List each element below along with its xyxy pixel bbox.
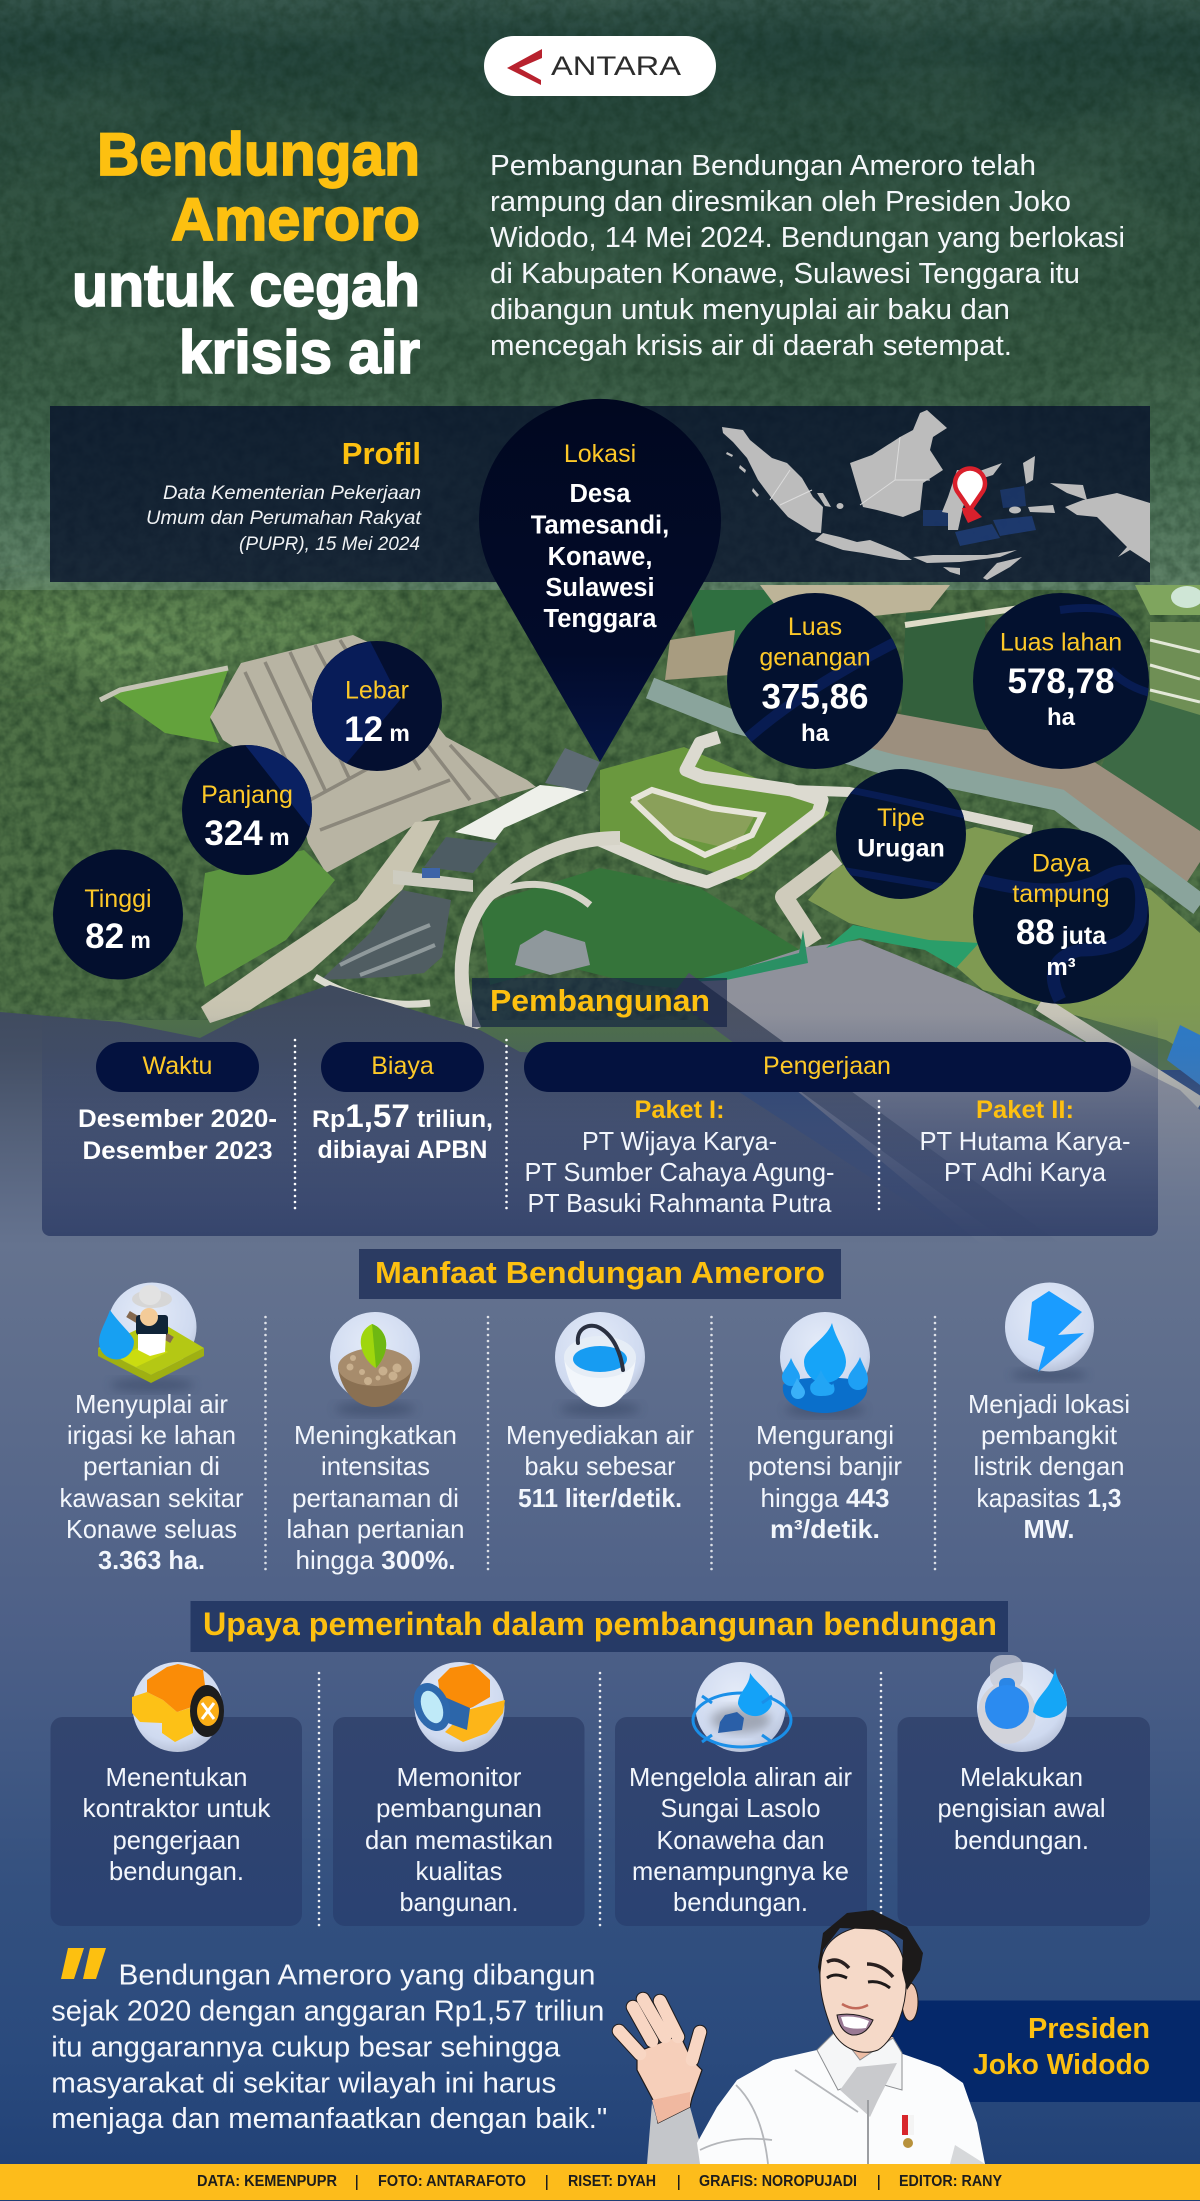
stat: Panjang: 324 m [204,814,290,853]
benefit: irigasi: 3.363 ha. [98,1545,205,1575]
stat: Panjang: Panjang [201,781,293,809]
head [818,1910,923,2052]
smile [837,2014,873,2035]
card: monitoring: bangunan. [400,1887,518,1917]
panel: president name [891,2000,1200,2102]
stat: Luas genangan: 375,86 [761,678,869,716]
footer credits: DATA: KEMENPUPR [197,2173,337,2190]
card: pengisian awal: bendungan. [954,1825,1089,1855]
icon: magnifier on gears [407,1662,505,1752]
panel: president name: Presiden [1028,2013,1150,2045]
Paket I: PT Sumber Cahaya Agung- [524,1157,834,1187]
heading: Upaya pemerintah: Upaya pemerintah dalam pembangunan bendungan [203,1606,997,1642]
card: monitoring [333,1662,584,1926]
icon: plant pot [330,1312,420,1416]
benefit: banjir: hingga 443 [760,1483,890,1513]
stat: Luas genangan [727,593,903,769]
heading: Pembangunan [472,978,727,1027]
card: pengisian awal [898,1655,1150,1926]
collar [817,2030,902,2112]
benefit: listrik [968,1282,1130,1544]
callout: location pin: Tenggara [544,605,657,633]
title: untuk cegah [72,252,420,319]
benefit: listrik: kapasitas 1,3 [976,1483,1122,1513]
benefit: intensitas tanam: intensitas [321,1451,430,1481]
stat: Lebar [312,641,442,771]
benefit: intensitas tanam: hingga 300%. [296,1545,456,1575]
text: source note: Data Kementerian Pekerjaan [163,482,421,504]
panel: pembangunan [42,978,1158,1236]
right hand lawn [808,827,1200,1060]
heading: Manfaat Bendungan Ameroro: Manfaat Bendungan Ameroro [375,1255,825,1290]
callout: location pin: Konawe, [548,543,652,571]
title [72,121,420,386]
river and banks [870,735,1200,862]
card: pengisian awal: Melakukan [960,1762,1083,1792]
quote text: sejak 2020 dengan anggaran Rp1,57 triliun [51,1996,604,2028]
sleeve [647,2103,706,2164]
card: kontraktor: bendungan. [109,1856,244,1886]
callout: location pin: Tamesandi, [531,512,669,540]
benefit: intensitas tanam [286,1312,464,1575]
stat: Tinggi: Tinggi [84,885,152,913]
card: monitoring: Memonitor [396,1762,522,1792]
intro paragraph: rampung dan diresmikan oleh Presiden Joko [490,186,1071,218]
heading: Manfaat Bendungan Ameroro [359,1249,841,1299]
benefit: air baku [506,1312,694,1513]
callout: location pin: Sulawesi [545,574,655,602]
footer credits: GRAFIS: NOROPUJADI [699,2173,857,2190]
white shirt [697,2030,985,2164]
neck [833,2037,893,2072]
benefit: listrik: MW. [1024,1514,1074,1544]
card: kontraktor [50,1662,302,1926]
card: monitoring: dan memastikan [365,1825,553,1855]
footer credits [0,2164,1200,2200]
stat: Luas genangan: Luas [788,613,842,641]
stat: Luas genangan: ha [801,720,830,747]
benefit: banjir [748,1312,902,1544]
column: Waktu [78,1042,277,1165]
panel: president name: Joko Widodo [973,2049,1150,2081]
Paket I: Paket I: [634,1096,724,1124]
card: kontraktor: Menentukan [106,1762,248,1792]
benefit: listrik: Menjadi lokasi [968,1389,1130,1419]
title: krisis air [179,319,420,386]
centre forest [480,868,806,990]
medal [902,2115,914,2135]
icon: Antara chevron [507,49,542,85]
stat: Daya tampung [973,828,1149,1004]
map of Indonesia [722,410,1150,580]
Paket I [524,1096,834,1218]
column: Biaya: Rp1,57 triliun, [312,1098,493,1134]
quote text: masyarakat di sekitar wilayah ini harus [51,2068,556,2100]
lake [0,985,1000,1262]
stat: Tipe: Urugan [857,834,945,862]
benefit: banjir: Mengurangi [756,1420,894,1450]
intro paragraph: di Kabupaten Konawe, Sulawesi Tenggara itu [490,258,1080,290]
intro paragraph [490,150,1125,362]
benefit: irigasi: Menyuplai air [75,1389,228,1419]
icon: location marker [955,469,985,510]
card: aliran air: bendungan. [673,1887,808,1917]
card: monitoring: kualitas [416,1856,502,1886]
panel: profil [50,406,1150,582]
callout: location pin [479,399,721,762]
illustration: President Joko Widodo [619,1910,985,2164]
column: Pengerjaan [524,1042,1131,1218]
icon: water bucket [555,1312,645,1416]
stat: Lebar: Lebar [345,677,409,705]
title: Ameroro [171,186,420,253]
icon: bulb and drop [977,1655,1067,1752]
benefit: irigasi: Konawe seluas [66,1514,237,1544]
card: aliran air: Mengelola aliran air [629,1762,852,1792]
stat: Daya tampung: tampung [1012,880,1110,908]
logo: ANTARA pill [484,36,716,96]
intro paragraph: dibangun untuk menyuplai air baku dan [490,294,1010,326]
card: monitoring: pembangunan [376,1793,542,1823]
stat: Tinggi: 82 m [85,917,151,956]
benefit: irigasi [60,1282,244,1575]
column: Biaya: Biaya [371,1052,434,1080]
benefit: irigasi: pertanian di [83,1451,220,1481]
benefit: air baku: 511 liter/detik. [518,1483,682,1513]
quote text: Bendungan Ameroro yang dibangun [118,1960,596,1992]
benefit: air baku: baku sebesar [524,1451,676,1481]
footer credits: EDITOR: RANY [899,2173,1002,2190]
quote text: itu anggarannya cukup besar sehingga [51,2032,561,2064]
card: aliran air [615,1662,867,1926]
logo: ANTARA pill: ANTARA [551,51,681,81]
Paket II: PT Adhi Karya [944,1157,1107,1187]
Paket I: PT Wijaya Karya- [582,1126,777,1156]
card: kontraktor: pengerjaan [112,1825,240,1855]
stat: Luas lahan: Luas lahan [1000,628,1122,656]
Paket II: PT Hutama Karya- [920,1126,1130,1156]
stat: Luas genangan: genangan [759,644,871,672]
quote text: menjaga dan memanfaatkan dengan baik." [51,2103,607,2135]
dam embankment [109,670,228,743]
heading: Profil: Profil [342,436,421,471]
callout: location pin: Desa [570,480,631,508]
text: source note: Umum dan Perumahan Rakyat [146,507,423,529]
intro paragraph: mencegah krisis air di daerah setempat. [490,330,1012,362]
stat: Luas lahan: ha [1047,704,1076,731]
benefit: intensitas tanam: pertanaman di [292,1483,459,1513]
stat: Panjang [182,745,312,875]
benefit: listrik: pembangkit [981,1420,1118,1450]
icon: quotation mark [61,1948,106,1979]
benefit: intensitas tanam: Meningkatkan [294,1420,457,1450]
icon: flood drops [780,1312,870,1417]
benefit: banjir: m³/detik. [770,1514,880,1544]
benefit: banjir: potensi banjir [748,1451,902,1481]
garden [600,747,830,880]
quote text [51,1960,607,2135]
card: aliran air: menampungnya ke [632,1856,849,1886]
benefit: irigasi: irigasi ke lahan [67,1420,236,1450]
stat: Lebar: 12 m [344,710,410,749]
card: aliran air: Konaweha dan [656,1825,824,1855]
heading: Upaya pemerintah [190,1601,1008,1652]
heading: Pembangunan: Pembangunan [490,983,710,1018]
stat: Luas lahan: 578,78 [1007,662,1115,701]
reservoir gravel [690,940,1200,1260]
card: kontraktor: kontraktor untuk [82,1793,272,1823]
benefit: air baku: Menyediakan air [506,1420,694,1450]
intro paragraph: Pembangunan Bendungan Ameroro telah [490,150,1036,182]
card: pengisian awal: pengisian awal [938,1793,1106,1823]
footer credits: FOTO: ANTARAFOTO [378,2173,526,2190]
Paket II [920,1096,1130,1187]
text: source note [146,482,423,555]
footer credits: RISET: DYAH [568,2173,656,2190]
fade into blue [0,1000,1200,1245]
benefit: listrik: listrik dengan [974,1451,1124,1481]
Paket I: PT Basuki Rahmanta Putra [528,1188,832,1218]
stat: Daya tampung: 88 juta [1016,913,1107,952]
Paket II: Paket II: [976,1096,1074,1124]
icon: gears and wheel [132,1662,224,1752]
column: Waktu: Desember 2020- [78,1105,277,1133]
intro paragraph: Widodo, 14 Mei 2024. Bendungan yang berlokasi [490,222,1125,254]
text: source note: (PUPR), 15 Mei 2024 [239,533,420,555]
stat: Tipe: Tipe [877,804,925,832]
benefit: irigasi: kawasan sekitar [60,1483,244,1513]
column: Biaya [312,1042,493,1164]
icon: lightning bolt [1005,1282,1094,1381]
column: Biaya: dibiayai APBN [318,1136,488,1164]
card: aliran air: Sungai Lasolo [660,1793,820,1823]
stat: Daya tampung: m³ [1046,954,1076,981]
stat: Tinggi [53,850,183,980]
benefit: intensitas tanam: lahan pertanian [286,1514,464,1544]
lower gradient [0,1244,1200,2201]
callout: location pin: Lokasi [564,440,636,468]
icon: water flow ring [693,1662,791,1752]
column: Pengerjaan: Pengerjaan [763,1052,891,1080]
waving hand [619,1999,702,2123]
stat: Daya tampung: Daya [1032,850,1090,878]
column: Waktu: Desember 2023 [82,1137,272,1165]
stat: Tipe [836,769,966,899]
title: Bendungan [97,121,420,188]
icon: farmer on field [98,1282,204,1392]
column: Waktu: Waktu [143,1052,212,1080]
stat: Luas lahan [973,593,1160,769]
